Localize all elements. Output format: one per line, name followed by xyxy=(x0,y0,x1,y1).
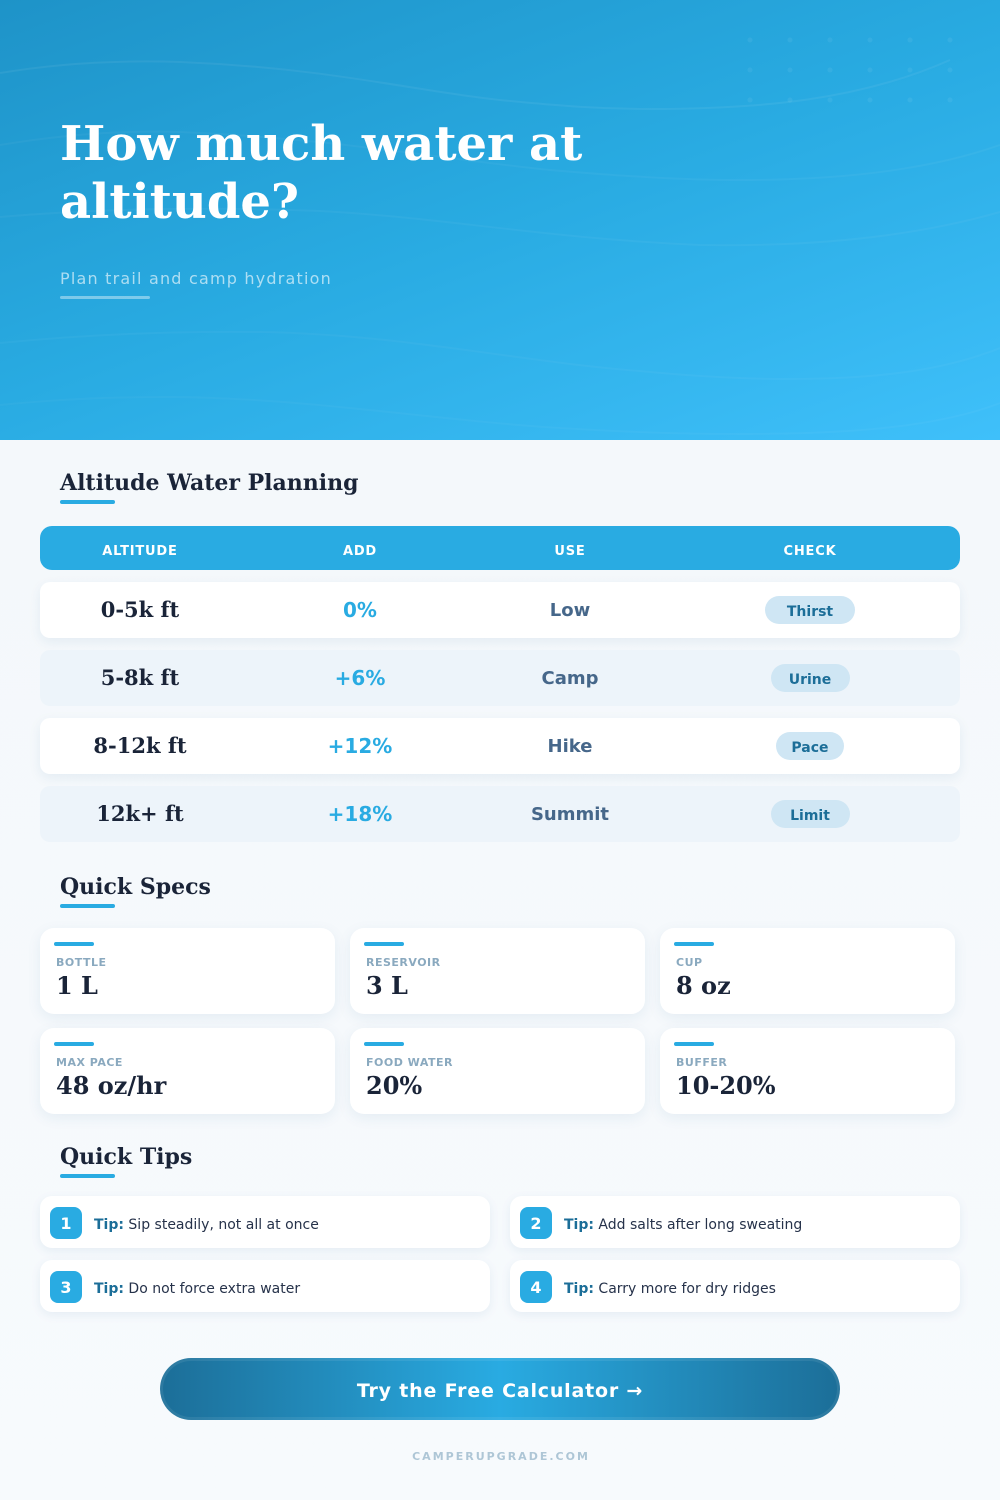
table row: 8-12k ft xyxy=(40,718,960,774)
spec card: max pace: MAX PACE xyxy=(56,1056,123,1069)
spec card: food water: FOOD WATER xyxy=(366,1056,453,1069)
spec card: buffer: BUFFER xyxy=(676,1056,727,1069)
table row: 5-8k ft: Camp xyxy=(542,668,598,689)
spec card: food water: 20% xyxy=(366,1071,422,1100)
tip 4: 4 xyxy=(530,1278,542,1297)
decorative dots xyxy=(748,38,952,102)
heading underline xyxy=(60,1174,115,1178)
hero wave lines xyxy=(0,60,950,110)
table row: 0-5k ft: Thirst xyxy=(787,604,833,620)
table row: 8-12k ft: 8-12k ft xyxy=(93,733,187,758)
table row: 8-12k ft: +12% xyxy=(328,734,392,758)
spec card: reservoir: 3 L xyxy=(366,971,408,1000)
table row: 0-5k ft: Low xyxy=(550,600,590,621)
table row: 12k+ ft: Summit xyxy=(531,804,609,825)
table row: 8-12k ft: Pace xyxy=(791,740,829,756)
table row: 12k+ ft: 12k+ ft xyxy=(96,801,184,826)
tip 2: 2 xyxy=(530,1214,542,1233)
subtitle: Plan trail and camp hydration xyxy=(60,269,332,288)
table row: 5-8k ft: +6% xyxy=(335,666,385,690)
table header: ADD xyxy=(343,544,377,559)
table header xyxy=(40,526,960,570)
tip 4 xyxy=(510,1260,960,1312)
spec card: bottle: BOTTLE xyxy=(56,956,107,969)
spec card: cup: CUP xyxy=(676,956,703,969)
tip 1: 1 xyxy=(60,1214,72,1233)
tip 4: Tip: Carry more for dry ridges xyxy=(564,1281,776,1297)
heading: quick specs: Quick Specs xyxy=(60,874,211,900)
spec card: max pace: 48 oz/hr xyxy=(56,1071,166,1100)
heading underline xyxy=(60,904,115,908)
subtitle accent bar xyxy=(60,296,150,299)
tip 1 xyxy=(40,1196,490,1248)
table row: 8-12k ft: Hike xyxy=(548,736,592,757)
heading: altitude water planning: Altitude Water Planning xyxy=(60,470,358,496)
spec card: buffer: 10-20% xyxy=(676,1071,776,1100)
spec card: cup xyxy=(660,928,955,1014)
spec card: cup: 8 oz xyxy=(676,971,731,1000)
tip 2: Tip: Add salts after long sweating xyxy=(564,1217,802,1233)
heading underline xyxy=(60,500,115,504)
tip 3: 3 xyxy=(60,1278,72,1297)
tip 2 xyxy=(510,1196,960,1248)
table row: 12k+ ft: +18% xyxy=(328,802,392,826)
spec card: bottle: 1 L xyxy=(56,971,98,1000)
spec card: max pace xyxy=(40,1028,335,1114)
call to action button: Try the Free Calculator → xyxy=(357,1380,643,1402)
table row: 5-8k ft xyxy=(40,650,960,706)
title: How much water at altitude? xyxy=(60,116,582,230)
heading: quick tips: Quick Tips xyxy=(60,1144,192,1170)
hero banner xyxy=(0,0,1000,440)
spec card: reservoir: RESERVOIR xyxy=(366,956,441,969)
tip 1: Tip: Sip steadily, not all at once xyxy=(94,1217,319,1233)
table row: 0-5k ft: 0% xyxy=(343,598,377,622)
table row: 12k+ ft xyxy=(40,786,960,842)
table header: ALTITUDE xyxy=(102,544,178,559)
spec card: reservoir xyxy=(350,928,645,1014)
spec card: food water xyxy=(350,1028,645,1114)
spec card: bottle xyxy=(40,928,335,1014)
table row: 5-8k ft: Urine xyxy=(789,672,831,688)
tip 3 xyxy=(40,1260,490,1312)
table row: 0-5k ft: 0-5k ft xyxy=(101,597,179,622)
tip 3: Tip: Do not force extra water xyxy=(94,1281,300,1297)
table header: USE xyxy=(554,544,586,559)
footer: CAMPERUPGRADE.COM xyxy=(412,1450,590,1463)
table row: 5-8k ft: 5-8k ft xyxy=(101,665,179,690)
spec card: buffer xyxy=(660,1028,955,1114)
table row: 12k+ ft: Limit xyxy=(790,808,830,824)
call to action button xyxy=(160,1358,840,1420)
table row: 0-5k ft xyxy=(40,582,960,638)
table header: CHECK xyxy=(784,544,836,559)
